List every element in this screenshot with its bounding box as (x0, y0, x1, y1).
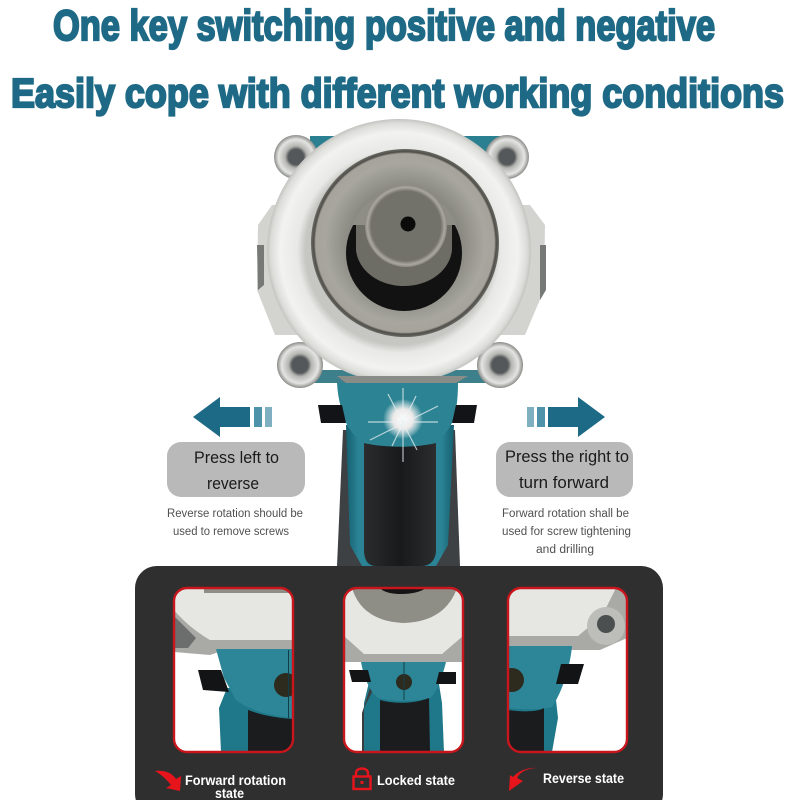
thumbnail: forward rotation (174, 588, 298, 752)
switch tab right (452, 405, 477, 423)
right arrow (527, 397, 605, 437)
thumbnail: reverse state (500, 588, 627, 752)
callout: press left: Press left to (194, 449, 279, 467)
forward description: used for screw tightening (502, 526, 631, 538)
LED light star (368, 388, 438, 462)
forward description: Forward rotation shall be (502, 508, 629, 520)
icon: lock (354, 768, 370, 789)
panel: switch states (135, 566, 663, 800)
wrench handle (337, 383, 460, 566)
label: reverse state: Reverse state (543, 771, 624, 786)
impact wrench main image (257, 119, 546, 566)
left arrow (193, 397, 272, 437)
reverse description: Reverse rotation should be (167, 508, 303, 520)
label: locked state: Locked state (377, 773, 455, 788)
switch tab left (318, 405, 346, 423)
reverse description: used to remove screws (173, 526, 289, 538)
forward description: and drilling (536, 544, 594, 556)
callout: press left: reverse (207, 475, 259, 493)
icon: forward arrow (155, 771, 181, 791)
callout: press right (496, 442, 633, 497)
forward description (502, 508, 631, 556)
thumbnail: locked state (344, 588, 463, 752)
wrench head (257, 119, 546, 388)
callout: press left (167, 442, 305, 497)
reverse description (167, 508, 303, 538)
callout: press right: turn forward (519, 474, 609, 492)
callout: press right: Press the right to (505, 448, 629, 466)
label: forward rotation: Forward rotation (185, 773, 286, 788)
title (11, 2, 784, 116)
icon: reverse arrow (509, 768, 538, 791)
label: forward rotation (185, 773, 286, 800)
